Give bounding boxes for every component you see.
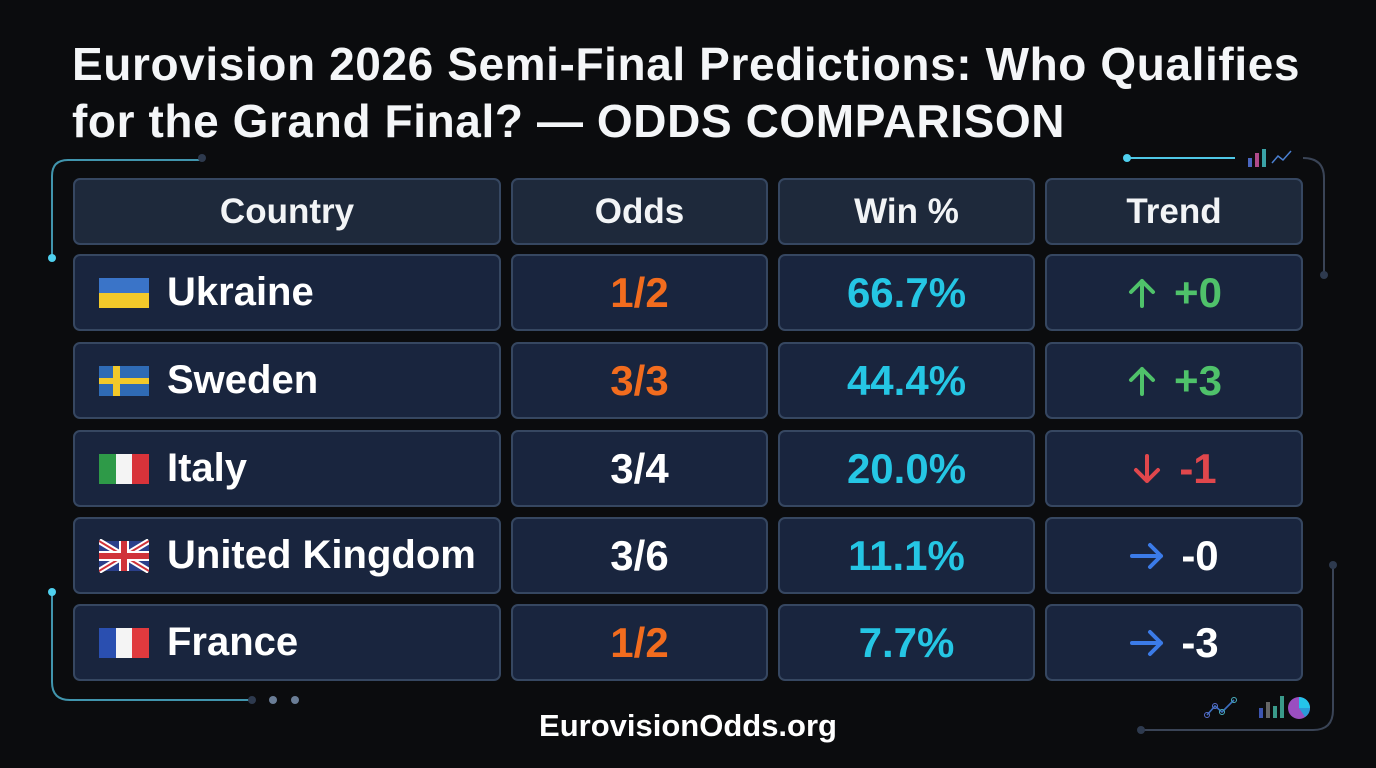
table: 11.1% <box>848 532 965 578</box>
table: France <box>167 620 298 664</box>
table: 3/3 <box>610 356 669 404</box>
table: 44.4% <box>847 356 966 404</box>
table: Odds <box>595 192 684 230</box>
icon: top-right charts <box>1248 149 1292 167</box>
title <box>72 38 1300 147</box>
footer: EurovisionOdds.org <box>539 708 837 743</box>
table: Italy <box>167 446 247 490</box>
table: 7.7% <box>859 618 954 666</box>
table: 66.7% <box>847 268 966 316</box>
table: 1/2 <box>610 618 669 666</box>
table: +3 <box>1174 356 1222 404</box>
table: United Kingdom <box>167 533 476 577</box>
table: Country <box>220 192 354 230</box>
table: Sweden <box>167 358 318 402</box>
table: 3/6 <box>610 532 669 578</box>
row: Ukraine <box>73 254 1303 331</box>
table: -0 <box>1181 532 1219 578</box>
table: 1/2 <box>610 268 669 316</box>
header row <box>73 178 1303 245</box>
table: -3 <box>1181 618 1219 666</box>
icon: bottom-right charts <box>1204 696 1310 719</box>
table: 20.0% <box>847 444 966 492</box>
row: Sweden <box>73 342 1303 419</box>
title: for the Grand Final? — ODDS COMPARISON <box>72 95 1065 147</box>
table: +0 <box>1174 268 1222 316</box>
title: Eurovision 2026 Semi-Final Predictions: Who Qualifies <box>72 38 1300 90</box>
row: France <box>73 604 1303 681</box>
table: Win % <box>854 192 959 230</box>
table: -1 <box>1179 444 1217 492</box>
table: 3/4 <box>610 444 669 492</box>
row: Italy <box>73 430 1303 507</box>
table: Ukraine <box>167 270 314 314</box>
row: United Kingdom <box>73 517 1303 594</box>
table: Trend <box>1126 192 1222 230</box>
